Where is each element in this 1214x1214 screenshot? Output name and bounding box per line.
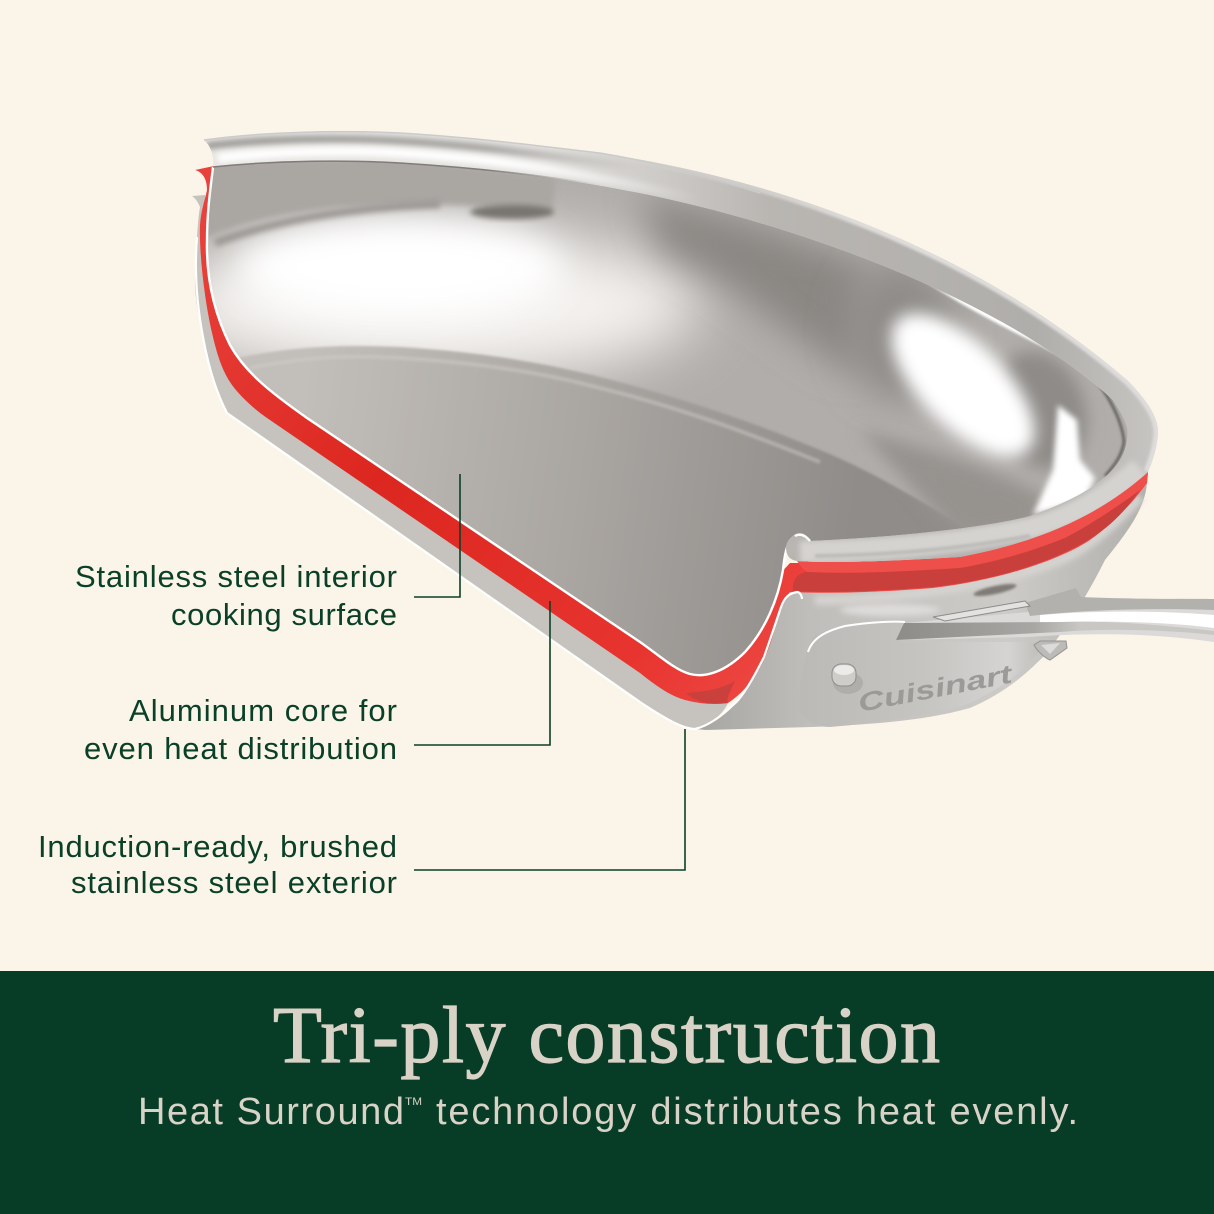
top left wall band (205, 160, 555, 238)
illustration: tri-ply pan cutaway (160, 120, 1214, 730)
engraved logo: Cuisinart (855, 658, 1016, 718)
callout: brushed exterior: Induction-ready, brushed (38, 829, 397, 864)
body rim reflections (815, 497, 1140, 616)
rim shading top (206, 139, 640, 168)
wall soft glow (160, 230, 700, 380)
handle bracket (933, 601, 1030, 621)
subheading continued: technology distributes heat evenly. (436, 1091, 1078, 1133)
rolled rim (190, 120, 1170, 580)
callout: brushed exterior: stainless steel exterior (71, 865, 397, 900)
leader line (414, 474, 460, 597)
red layer shaded section (793, 490, 1140, 592)
aluminum core red layer (195, 166, 1148, 704)
front rivet (832, 664, 863, 694)
handle white streak (1040, 612, 1214, 628)
pan floor (238, 346, 1000, 690)
upper right wall shade (640, 195, 870, 370)
rim highlight (218, 151, 700, 200)
red floor shaded patch (686, 681, 735, 704)
outer stainless layer section (192, 195, 728, 729)
rim inner edge line (213, 161, 600, 185)
rim outer edge line (204, 132, 760, 193)
floor ring (250, 357, 820, 462)
back rivet (1034, 641, 1067, 660)
rim front shadow (815, 536, 1030, 556)
crescent highlight (930, 286, 1056, 356)
handle (896, 588, 1214, 642)
callout: aluminum core: Aluminum core for (129, 693, 397, 728)
plate edge highlight (808, 622, 905, 652)
handle base (896, 599, 1214, 642)
banner (0, 971, 1214, 1214)
heading: Tri-ply construction (273, 992, 940, 1080)
trademark: TM (405, 1096, 422, 1108)
cut lip curl (795, 535, 810, 541)
rim outer light edge (688, 170, 1158, 472)
red layer light strip (797, 472, 1148, 573)
rim shadow line (1097, 386, 1126, 478)
band dark reflection (470, 205, 554, 219)
rivet plate (799, 622, 1045, 727)
wall highlight (235, 216, 565, 320)
subheading: Heat Surround (138, 1091, 404, 1133)
background (0, 0, 1214, 971)
callout: brushed exterior (38, 729, 685, 900)
callout: stainless steel interior (75, 474, 460, 632)
far wall shade (845, 260, 955, 400)
interior cooking surface (208, 162, 1128, 674)
callout: aluminum core (84, 601, 550, 766)
leader line (414, 729, 685, 870)
right wall dark surround (1003, 347, 1092, 473)
right wall highlight (881, 303, 1045, 466)
rim front band (800, 468, 1140, 552)
leader line (414, 601, 550, 745)
plate tab and top strip (1025, 588, 1214, 616)
lower right wall (868, 432, 1040, 528)
handle dark strip (896, 622, 1214, 640)
callout: stainless steel interior: Stainless steel interior (75, 559, 397, 594)
lower right highlight (1033, 405, 1095, 515)
callout: stainless steel interior: cooking surface (171, 597, 397, 632)
callout: aluminum core: even heat distribution (84, 731, 397, 766)
exterior body of pan (695, 483, 1147, 730)
outer edge highlight (196, 237, 802, 729)
interior edge highlight (207, 167, 810, 675)
